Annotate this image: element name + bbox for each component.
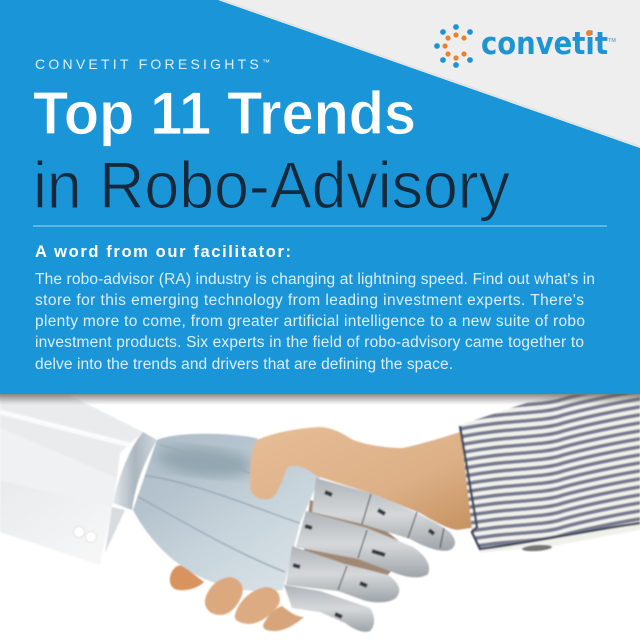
robot shirt sleeve <box>0 394 143 565</box>
robot palm <box>132 433 320 592</box>
sleeve stripes <box>460 394 640 548</box>
finger joints <box>293 492 444 617</box>
logo wordmark: convetit <box>481 26 608 62</box>
intro paragraph: store for this emerging technology from leading investment experts. There's <box>35 292 584 309</box>
robot wrist <box>113 432 157 510</box>
heading: A word from our facilitator: A word from our facilitator: <box>35 243 291 261</box>
intro paragraph <box>35 271 595 373</box>
robot fingers <box>284 478 455 632</box>
illustration: robot and human handshake <box>0 382 640 632</box>
eyebrow: Convetit Foresights: CONVETIT FORESIGHTS <box>35 56 259 72</box>
title: Top 11 Trends: Top 11 Trends <box>33 80 416 147</box>
human arm and thumb <box>250 427 477 530</box>
human fingers under robot palm <box>170 565 304 631</box>
intro paragraph: The robo-advisor (RA) industry is changing at lightning speed. Find out what's in <box>35 271 595 288</box>
human shirt sleeve <box>458 394 640 553</box>
intro paragraph: plenty more to come, from greater artificial intelligence to a new suite of robo <box>35 313 585 330</box>
intro paragraph: delve into the trends and drivers that are defining the space. <box>35 356 453 373</box>
logo trademark: TM <box>608 38 616 44</box>
panel: blue header <box>0 0 640 394</box>
logo: convetit <box>434 24 616 68</box>
logo orange i dot <box>586 30 592 36</box>
title: in Robo-Advisory: in Robo-Advisory <box>33 148 510 222</box>
panel: grey logo corner <box>218 0 640 148</box>
dark gaps behind robot fingers <box>300 500 410 592</box>
panel: photo shadow band <box>0 394 640 405</box>
eyebrow: Convetit Foresights: ™ <box>262 58 270 67</box>
intro paragraph: investment products. Six experts in the field of robo-advisory came together to <box>35 334 584 351</box>
logo mark dots <box>434 24 473 68</box>
